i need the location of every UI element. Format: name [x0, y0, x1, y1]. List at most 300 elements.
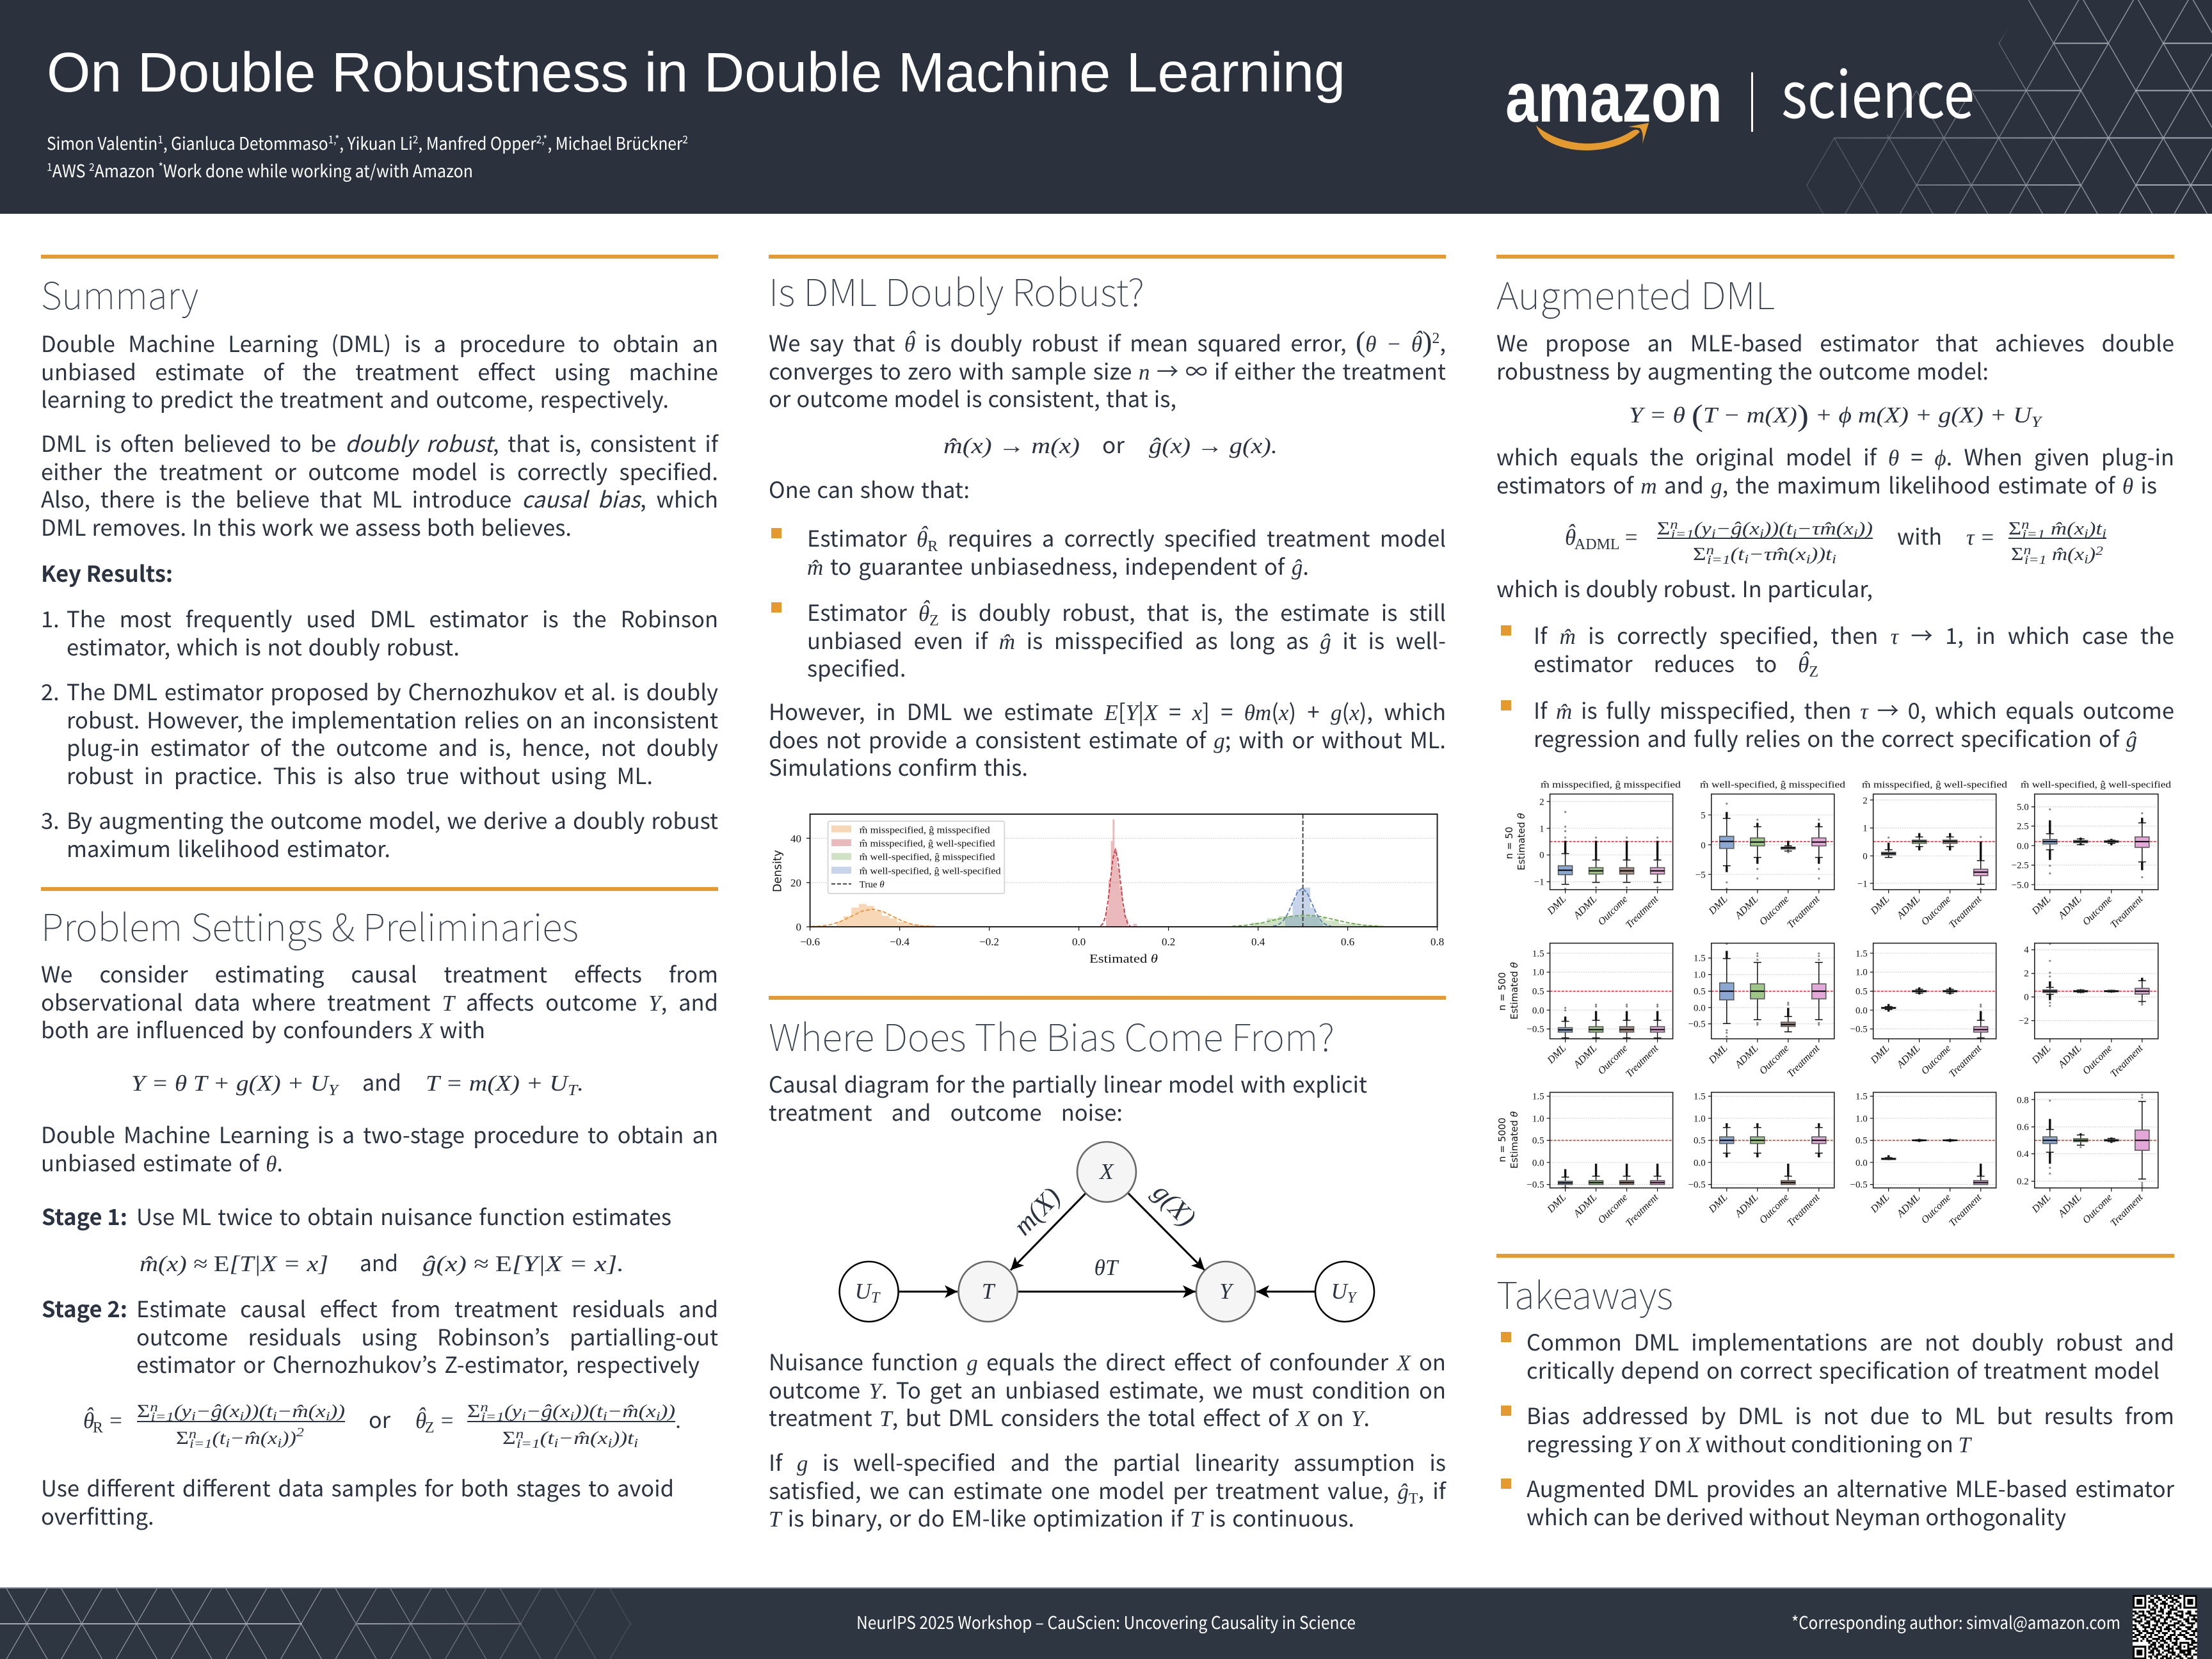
equation: ADML estimator: m̂(x: [2047, 545, 2085, 565]
equation: Robinson and Z estimators: 2: [296, 1425, 304, 1439]
equation: ADML estimator: n: [1670, 518, 1678, 532]
box plot: n=500, m mis, g mis: Treatment: [1624, 1043, 1661, 1080]
node labels: T: [871, 1290, 881, 1306]
equation: Robinson and Z estimators: i: [277, 1436, 282, 1450]
equation: Robinson and Z estimators: n: [189, 1427, 196, 1441]
arrow: X to T: [1011, 1194, 1086, 1270]
equation: ADML estimator: ˆ: [1567, 520, 1576, 545]
footer: corresponding author: *Corresponding author: simval@amazon.com: [1791, 1609, 2120, 1634]
text block: sample splitting note: overfitting.: [41, 1499, 154, 1531]
box plot: n=5000, m mis, g mis: [1527, 1092, 1673, 1229]
box plot: n=5000, m mis, g mis: Treatment: [1624, 1192, 1661, 1229]
equation: Robinson and Z estimators: )): [280, 1429, 296, 1448]
equation: ADML estimator: Σ: [1657, 519, 1670, 539]
authors: , Manfred Opper: [418, 130, 536, 155]
equation: ADML estimator: n: [2021, 518, 2030, 532]
bullet: Robinson estimator: Estimator θR requires a correctly specified treatment model: [807, 521, 1446, 555]
node labels: U: [1331, 1279, 1347, 1304]
authors: , Yikuan Li: [339, 130, 413, 155]
box plot: n=500, m well, g mis: ADML: [1733, 1043, 1761, 1071]
takeaway 2: regressing Y on X without conditioning on T: [1527, 1427, 1971, 1459]
box plot: n=5000, m well, g mis: −0.5: [1688, 1180, 1706, 1190]
authors: 1,*: [328, 131, 339, 147]
text block: well-specified g: [769, 1445, 1447, 1533]
equation: ADML estimator: ))(t: [1762, 519, 1793, 539]
box plot: n=500, m mis, g well: [1850, 943, 1996, 1080]
box plot: n=500, m well, g well: [2019, 943, 2158, 1080]
text block: definition of double robustness: We say that θ is doubly robust if mean squared error, (θ − θ)2,: [769, 325, 1446, 358]
equation: Robinson and Z estimators: .: [676, 1408, 682, 1433]
equation: Robinson and Z estimators: θ: [415, 1408, 426, 1433]
text block: augmented proposal: We propose an MLE-based estimator that achieves double: [1496, 326, 2174, 358]
box plot: n=5000, m well, g well: 0.6: [2017, 1123, 2029, 1133]
y axis tick labels: [790, 833, 801, 933]
text block: doubly robust belief: [41, 426, 719, 542]
bullet: m fully misspecified: If m̂ is fully misspecified, then τ → 0, which equals outcome: [1534, 693, 2174, 725]
equation: Robinson and Z estimators: −ĝ(x: [196, 1402, 240, 1422]
box plot: n=50, m mis, g well: −1: [1857, 879, 1868, 890]
equation: Robinson and Z estimators: −m̂(x: [277, 1402, 326, 1422]
panel: problem settings and preliminaries: Stage 1:: [42, 1199, 127, 1231]
x axis tick labels: 0.0: [1072, 936, 1086, 948]
equation: ADML estimator: i=1: [2022, 527, 2045, 541]
equation: Robinson and Z estimators: i: [273, 1409, 277, 1423]
box plot: n=500, m well, g well: Treatment: [2108, 1043, 2145, 1080]
text block: stage 2: outcome residuals using Robinson’s partialling-out: [136, 1320, 718, 1352]
equation: consistency: or: [1102, 428, 1125, 460]
boxplot column titles: m̂ misspecified, ĝ well-specified: [1862, 780, 2008, 790]
text block: doubly robust belief: DML is often believed to be doubly robust, that is, consistent if: [41, 426, 718, 458]
equation: Robinson and Z estimators: Z: [425, 1420, 435, 1436]
box plot: n=50, m well, g mis: −5: [1695, 870, 1706, 881]
text block: stage 2: Estimate causal effect from treatment residuals and: [136, 1292, 718, 1324]
box plot: n=50, m well, g well: Treatment: [2108, 894, 2145, 931]
box plot: n=50, m well, g mis: [1695, 794, 1834, 931]
box plot: n=50, m mis, g well: 1: [1863, 824, 1868, 834]
text block: causal diagram caption: treatment and outcome noise:: [769, 1095, 1123, 1127]
box plot: n=500, m well, g mis: [1688, 943, 1834, 1080]
row label: n = 50: [1503, 813, 1527, 870]
text block: DML estimate: Simulations confirm this.: [769, 750, 1028, 782]
text block: DML intro: learning to predict the treatment and outcome, respectively.: [41, 382, 669, 414]
row label: n = 500: Estimated θ: [1509, 962, 1520, 1020]
box plot: n=500, m mis, g well: ADML: [1895, 1043, 1923, 1071]
equation: consistency: [943, 428, 1278, 460]
row label: n = 500: n = 500: [1496, 972, 1508, 1011]
box plot: n=500, m mis, g well: −0.5: [1850, 1025, 1868, 1035]
box plot: n=50, m well, g mis: DML: [1706, 894, 1730, 917]
equation: Robinson and Z estimators: i: [522, 1409, 526, 1423]
box plot: n=5000, m mis, g mis: 1.5: [1532, 1092, 1544, 1102]
text block: stage 2: estimator or Chernozhukov’s Z-estimator, respectively: [136, 1347, 700, 1379]
heading: is DML doubly robust: Is DML Doubly Robust?: [769, 263, 1144, 317]
node: UY: [1315, 1262, 1374, 1322]
authors: , Michael Brückner: [547, 130, 683, 155]
causal diagram: [840, 1142, 1374, 1322]
box plot: n=5000, m mis, g well: DML: [1868, 1192, 1892, 1215]
equation: Robinson and Z estimators: i: [634, 1436, 638, 1450]
equation: partially linear model: T = m(X) + U: [426, 1071, 551, 1096]
legend: True θ: [860, 879, 885, 890]
box plot: n=500, m mis, g well: 0.0: [1855, 1006, 1868, 1016]
node: T: [959, 1262, 1018, 1322]
box plot: n=500, m mis, g mis: DML: [1545, 1043, 1569, 1066]
key result 2: robust in practice. This is also true without using ML.: [67, 758, 653, 790]
equation: ADML estimator: i: [2102, 527, 2106, 541]
equation: Robinson and Z estimators: )): [659, 1402, 675, 1422]
key result 1: The most frequently used DML estimator is the Robinson: [67, 602, 718, 634]
box plot: n=500, m mis, g mis: 0.5: [1532, 987, 1544, 997]
legend: m̂ well-specified, ĝ misspecified: [860, 853, 995, 863]
text block: augmented proposal: [1496, 326, 2174, 386]
equation: partially linear model: [131, 1065, 584, 1099]
equation: nuisance functions: [140, 1246, 624, 1278]
equation: Robinson and Z estimators: )): [328, 1402, 345, 1422]
equation: Robinson and Z estimators: i: [554, 1436, 558, 1450]
equation: ADML estimator: i: [1711, 527, 1716, 541]
box plot: n=500, m well, g mis: −0.5: [1688, 1020, 1706, 1030]
node labels: [855, 1159, 1358, 1306]
row label: n = 50: n = 50: [1503, 827, 1515, 859]
equation: Robinson and Z estimators: i=1: [517, 1437, 540, 1451]
text block: nuisance function: treatment T, but DML considers the total effect of X on Y.: [769, 1400, 1370, 1432]
box plot: n=50, m well, g well: ADML: [2056, 894, 2084, 922]
panel: summary: 3.: [41, 803, 60, 835]
box plot: n=50, m well, g well: 2.5: [2017, 822, 2029, 832]
box plot: n=500, m mis, g mis: [1527, 943, 1673, 1080]
node labels: m(X): [1008, 1182, 1066, 1241]
fit curves: [812, 909, 933, 927]
box plot: n=50, m mis, g mis: 1: [1539, 824, 1544, 835]
equation: ADML estimator: ))t: [1809, 545, 1833, 565]
arrow: X to Y: [1128, 1194, 1205, 1270]
key result 3: maximum likelihood estimator.: [67, 831, 390, 863]
title: On Double Robustness in Double Machine Learning: [47, 42, 1345, 104]
text block: well-specified g: T is binary, or do EM-like optimization if T is continuous.: [769, 1501, 1354, 1533]
equation: partially linear model: T: [568, 1082, 579, 1099]
equation: ADML estimator: (y: [1694, 519, 1712, 539]
equation: ADML estimator: −ĝ(x: [1716, 519, 1760, 539]
box plot: n=500, m well, g well: DML: [2030, 1043, 2053, 1066]
box plot: n=5000, m well, g well: Outcome: [2081, 1192, 2115, 1226]
affiliations: Work done while working at/with Amazon: [163, 157, 473, 182]
equation: Robinson and Z estimators: θ: [83, 1408, 94, 1433]
box plot: n=500, m well, g mis: Treatment: [1785, 1043, 1822, 1080]
arrow: UY to Y: [1256, 1290, 1315, 1293]
box plot: n=500, m well, g well: 4: [2024, 945, 2029, 956]
box plot: n=5000, m well, g well: Treatment: [2108, 1192, 2145, 1229]
box plot: n=5000, m well, g well: DML: [2030, 1192, 2053, 1215]
box plot: n=500, m mis, g mis: 1.5: [1532, 949, 1544, 959]
text block: stage 1: Use ML twice to obtain nuisance function estimates: [136, 1199, 671, 1231]
equation: ADML estimator: ): [2087, 545, 2096, 565]
equation: Robinson and Z estimators: ))(t: [573, 1402, 604, 1422]
panel: takeaways: [1496, 1254, 2174, 1543]
box plot: n=5000, m mis, g well: Treatment: [1947, 1192, 1984, 1229]
text block: nuisance function: [769, 1345, 1446, 1432]
x axis tick labels: [800, 936, 1444, 948]
equation: Robinson and Z estimators: [83, 1400, 682, 1451]
equation: Robinson and Z estimators: −ĝ(x: [526, 1402, 570, 1422]
box plot: n=50, m mis, g well: Treatment: [1947, 894, 1984, 931]
box plot: n=5000, m mis, g well: [1850, 1092, 1996, 1229]
equation: Robinson and Z estimators: i=1: [189, 1437, 212, 1451]
box plot: n=500, m mis, g mis: 1.0: [1532, 968, 1544, 978]
authors: 1: [157, 131, 163, 147]
equation: Robinson and Z estimators: Σ: [502, 1429, 516, 1448]
heading: takeaways: Takeaways: [1496, 1266, 1673, 1320]
box plot: n=50, m well, g mis: ADML: [1733, 894, 1761, 922]
legend: [828, 821, 1004, 894]
bullet: Robinson estimator: [771, 521, 1446, 581]
box plot: n=5000, m mis, g well: ADML: [1895, 1192, 1923, 1220]
box plot: n=5000, m mis, g mis: ADML: [1571, 1192, 1599, 1220]
authors: 2: [413, 131, 418, 147]
box plot: n=500, m mis, g well: Outcome: [1919, 1043, 1953, 1077]
box plot: n=5000, m mis, g well: 0.5: [1855, 1136, 1868, 1146]
text block: DML estimate: [769, 694, 1446, 782]
equation: augmented outcome model: + ϕ m(X) + g(X) + U: [1809, 403, 2033, 428]
histogram: m well g well: [1285, 888, 1323, 927]
box plot: n=50, m mis, g well: DML: [1868, 894, 1892, 917]
amazon science logo: [1505, 44, 1975, 150]
text block: two-stage procedure: unbiased estimate of θ.: [41, 1146, 283, 1178]
node labels: X: [1098, 1159, 1114, 1184]
equation: partially linear model: .: [577, 1071, 584, 1096]
equation: ADML estimator: (t: [1731, 545, 1745, 565]
equation: Robinson and Z estimators: or: [369, 1402, 391, 1434]
equation: Robinson and Z estimators: −m̂(x: [607, 1402, 656, 1422]
equation: ADML estimator: i: [1832, 552, 1836, 566]
box plot: n=500, m mis, g mis: Outcome: [1596, 1043, 1630, 1077]
arrow: T to Y: [1018, 1290, 1196, 1293]
header band: [0, 0, 2212, 214]
box plot: n=5000, m well, g mis: ADML: [1733, 1192, 1761, 1220]
text block: well-specified g: satisfied, we can estimate one model per treatment value, ĝT, if: [769, 1473, 1446, 1507]
box plot: n=500, m mis, g well: DML: [1868, 1043, 1892, 1066]
box plot: n=50, m mis, g mis: DML: [1545, 894, 1569, 917]
box plot: n=5000, m well, g well: 0.2: [2017, 1177, 2029, 1187]
text block: doubly robust belief: DML removes. In this work we assess both believes.: [41, 510, 572, 542]
y axis label: Density: [771, 850, 785, 892]
box plot: n=500, m well, g well: ADML: [2056, 1043, 2084, 1071]
affiliations: *: [159, 158, 163, 174]
equation: augmented outcome model: Y: [2032, 414, 2043, 431]
equation: ADML estimator: ADML: [1575, 536, 1620, 553]
box plot: n=5000, m mis, g mis: −0.5: [1527, 1180, 1544, 1190]
bullet: Z estimator: unbiased even if m̂ is misspecified as long as ĝ it is well-: [807, 623, 1446, 655]
equation: ADML estimator: i=1: [2024, 553, 2047, 567]
box plot: n=5000, m well, g well: [2017, 1093, 2158, 1229]
equation: nuisance functions: ĝ(x) ≈ E[Y|X = x].: [422, 1251, 624, 1276]
equation: ADML estimator: i: [2084, 552, 2088, 566]
heading: summary: Summary: [41, 266, 198, 320]
equation: Robinson and Z estimators: i: [191, 1409, 196, 1423]
text block: DML estimate: However, in DML we estimate E[Y|X = x] = θm(x) + g(x), which: [769, 694, 1446, 726]
bullet: m correctly specified: If m̂ is correctly specified, then τ → 1, in which case the: [1534, 618, 2174, 650]
equation: Robinson and Z estimators: i: [656, 1409, 661, 1423]
box plot: n=500, m well, g well: Outcome: [2081, 1043, 2115, 1077]
equation: consistency: m̂(x) → m(x): [943, 433, 1080, 458]
box plot: n=5000, m well, g well: 0.4: [2017, 1150, 2029, 1160]
box plot: n=50, m mis, g well: 2: [1863, 796, 1868, 806]
box plot: n=50, m well, g mis: Treatment: [1785, 894, 1822, 931]
equation: ADML estimator: −τm̂(x: [1749, 545, 1806, 565]
text block: two-stage procedure: [41, 1118, 718, 1178]
heading: problem settings: Problem Settings & Preliminaries: [41, 898, 579, 952]
box plot: n=50, m mis, g mis: 2: [1539, 797, 1544, 808]
equation: Robinson and Z estimators: ))(t: [243, 1402, 273, 1422]
text block: doubly robust: which is doubly robust. In particular,: [1496, 572, 1873, 604]
text block: original model: [1496, 440, 2174, 500]
box plot: n=500, m mis, g mis: ADML: [1571, 1043, 1599, 1071]
box plot: n=50, m well, g mis: 0: [1701, 841, 1706, 851]
row label: n = 5000: [1496, 1111, 1520, 1169]
histogram: m well g mis: [1251, 917, 1384, 927]
box plot: n=5000, m well, g mis: [1688, 1092, 1834, 1229]
authors: 2,*: [536, 131, 547, 147]
panel: summary: 2.: [41, 675, 60, 707]
box plot: n=50, m well, g well: 0.0: [2017, 842, 2029, 852]
equation: ADML estimator: θ: [1565, 525, 1576, 550]
affiliations: Amazon: [95, 157, 159, 182]
y axis tick labels: 40: [790, 833, 801, 845]
boxplot column titles: m̂ well-specified, ĝ misspecified: [1700, 780, 1846, 790]
authors: Simon Valentin: [47, 130, 169, 155]
equation: ADML estimator: i=1: [1671, 527, 1694, 541]
takeaway 3: Augmented DML provides an alternative MLE-based estimator: [1527, 1471, 2174, 1503]
equation: ADML estimator: Σ: [1693, 545, 1706, 565]
key result 2: The DML estimator proposed by Chernozhukov et al. is doubly: [67, 675, 718, 707]
equation: partially linear model: Y: [328, 1082, 340, 1099]
equation: augmented outcome model: (: [1692, 399, 1703, 433]
text block: sample splitting note: [41, 1471, 674, 1531]
box plot: n=500, m well, g mis: DML: [1706, 1043, 1730, 1066]
heading: where does the bias come from: Where Does The Bias Come From?: [769, 1008, 1334, 1062]
text block: DML intro: Double Machine Learning (DML) is a procedure to obtain an: [41, 326, 718, 358]
equation: Robinson and Z estimators: =: [108, 1408, 123, 1433]
text block: problem statement: observational data where treatment T affects outcome Y, and: [41, 985, 718, 1017]
heading: augmented DML: Augmented DML: [1496, 266, 1775, 320]
text block: well-specified g: If g is well-specified and the partial linearity assumption is: [769, 1445, 1446, 1477]
x axis tick labels: 0.4: [1251, 936, 1265, 948]
equation: ADML estimator: [1565, 518, 2106, 567]
text block: problem statement: We consider estimating causal treatment effects from: [41, 957, 718, 989]
node labels: θT: [1094, 1255, 1119, 1280]
icon: QR code: [2133, 1595, 2197, 1659]
box plot: n=5000, m mis, g mis: 1.0: [1532, 1114, 1544, 1125]
equation: augmented outcome model: T − m(X): [1703, 403, 1797, 428]
subheading: key results: Key Results:: [41, 556, 173, 588]
equation: ADML estimator: n: [1706, 543, 1714, 557]
equation: ADML estimator: Σ: [2008, 519, 2021, 539]
equation: nuisance functions: m̂(x) ≈ E[T|X = x]: [140, 1251, 328, 1276]
true theta line: [1302, 814, 1304, 927]
box plot: n=50, m mis, g mis: [1534, 794, 1673, 931]
key result 3: By augmenting the outcome model, we derive a doubly robust: [67, 803, 718, 835]
node labels: T: [982, 1279, 996, 1304]
node: Y: [1196, 1262, 1255, 1322]
equation: ADML estimator: n: [2024, 543, 2031, 557]
box plot: n=5000, m mis, g well: 1.0: [1855, 1114, 1868, 1125]
box plot: n=500, m mis, g well: 0.5: [1855, 987, 1868, 997]
text block: one can show: One can show that:: [769, 472, 970, 504]
text block: doubly robust belief: Also, there is the believe that ML introduce causal bias, which: [41, 482, 718, 514]
equation: ADML estimator: i: [2084, 527, 2088, 541]
text block: augmented proposal: robustness by augmenting the outcome model:: [1496, 354, 1989, 386]
panel: augmented DML: [1496, 255, 2174, 1229]
equation: partially linear model: Y = θ T + g(X) + U: [131, 1071, 307, 1096]
text block: DML intro: unbiased estimate of the treatment effect using machine: [41, 355, 718, 387]
equation: Robinson and Z estimators: i: [239, 1409, 244, 1423]
key result 2: plug-in estimator of the outcome and is, hence, not doubly: [67, 730, 718, 762]
equation: Robinson and Z estimators: (y: [504, 1402, 522, 1422]
row label: n = 5000: Estimated θ: [1509, 1111, 1520, 1169]
x axis tick labels: −0.6: [800, 936, 820, 948]
equation: ADML estimator: i=1: [1707, 553, 1731, 567]
equation: ADML estimator: 2: [2096, 544, 2103, 558]
node: X: [1077, 1142, 1136, 1202]
equation: Robinson and Z estimators: −m̂(x: [230, 1429, 278, 1448]
key result 1: [41, 602, 718, 662]
box plot: n=5000, m well, g mis: 1.0: [1694, 1114, 1706, 1125]
takeaway 1: critically depend on correct specification of treatment model: [1527, 1353, 2160, 1385]
panel: where does the bias come from: [769, 996, 1447, 1533]
equation: ADML estimator: Σ: [2011, 545, 2024, 565]
box plot: n=50, m mis, g mis: Outcome: [1596, 894, 1630, 927]
equation: Robinson and Z estimators: −m̂(x: [558, 1429, 608, 1448]
panel: problem settings and preliminaries: Stage 2:: [42, 1292, 127, 1324]
equation: consistency: ĝ(x) → g(x).: [1149, 433, 1278, 458]
node labels: Y: [1347, 1290, 1358, 1306]
node labels: U: [855, 1279, 871, 1304]
affiliations: 1: [47, 158, 52, 174]
boxplot column titles: [1541, 780, 2172, 790]
density chart: estimated theta: [771, 814, 1444, 966]
takeaway 3: [1527, 1474, 2174, 1530]
text block: problem statement: [41, 957, 718, 1045]
arrow: UT to T: [899, 1290, 958, 1293]
y axis tick labels: 0: [796, 921, 801, 933]
text block: causal diagram caption: Causal diagram for the partially linear model with explicit: [769, 1067, 1367, 1099]
box plot: n=5000, m mis, g mis: DML: [1545, 1192, 1569, 1215]
bullet: Z estimator: specified.: [807, 651, 906, 683]
bullet: m fully misspecified: [1501, 693, 2174, 753]
box plot: n=500, m mis, g mis: −0.5: [1527, 1025, 1544, 1035]
equation: ADML estimator: i: [1806, 552, 1811, 566]
equation: Robinson and Z estimators: n: [480, 1400, 488, 1415]
equation: Robinson and Z estimators: (t: [212, 1429, 227, 1448]
legend: m̂ well-specified, ĝ well-specified: [860, 867, 1001, 877]
box plot: n=50, m mis, g mis: ADML: [1571, 894, 1599, 922]
text block: two-stage procedure: Double Machine Learning is a two-stage procedure to obtain an: [41, 1118, 718, 1150]
box plot: n=50, m well, g mis: 5: [1701, 811, 1706, 821]
takeaway 1: [1527, 1327, 2174, 1383]
box plot: n=500, m well, g mis: 0.5: [1694, 987, 1706, 997]
equation: ADML estimator: i: [1759, 527, 1764, 541]
box plot: n=5000, m mis, g well: 0.0: [1855, 1158, 1868, 1169]
equation: ADML estimator: )t: [2087, 519, 2103, 539]
equation: Robinson and Z estimators: i=1: [481, 1410, 504, 1424]
text block: definition of double robustness: or outcome model is consistent, that is,: [769, 381, 1176, 413]
row label: n = 5000: n = 5000: [1496, 1118, 1508, 1162]
bullet: Z estimator: ˆ: [922, 596, 929, 621]
box plot: n=50, m mis, g well: [1857, 794, 1996, 931]
key result 2: [41, 675, 718, 790]
equation: ADML estimator: τ =: [1966, 525, 1995, 550]
node labels: g(X): [1147, 1178, 1201, 1233]
equation: Robinson and Z estimators: (y: [174, 1402, 192, 1422]
